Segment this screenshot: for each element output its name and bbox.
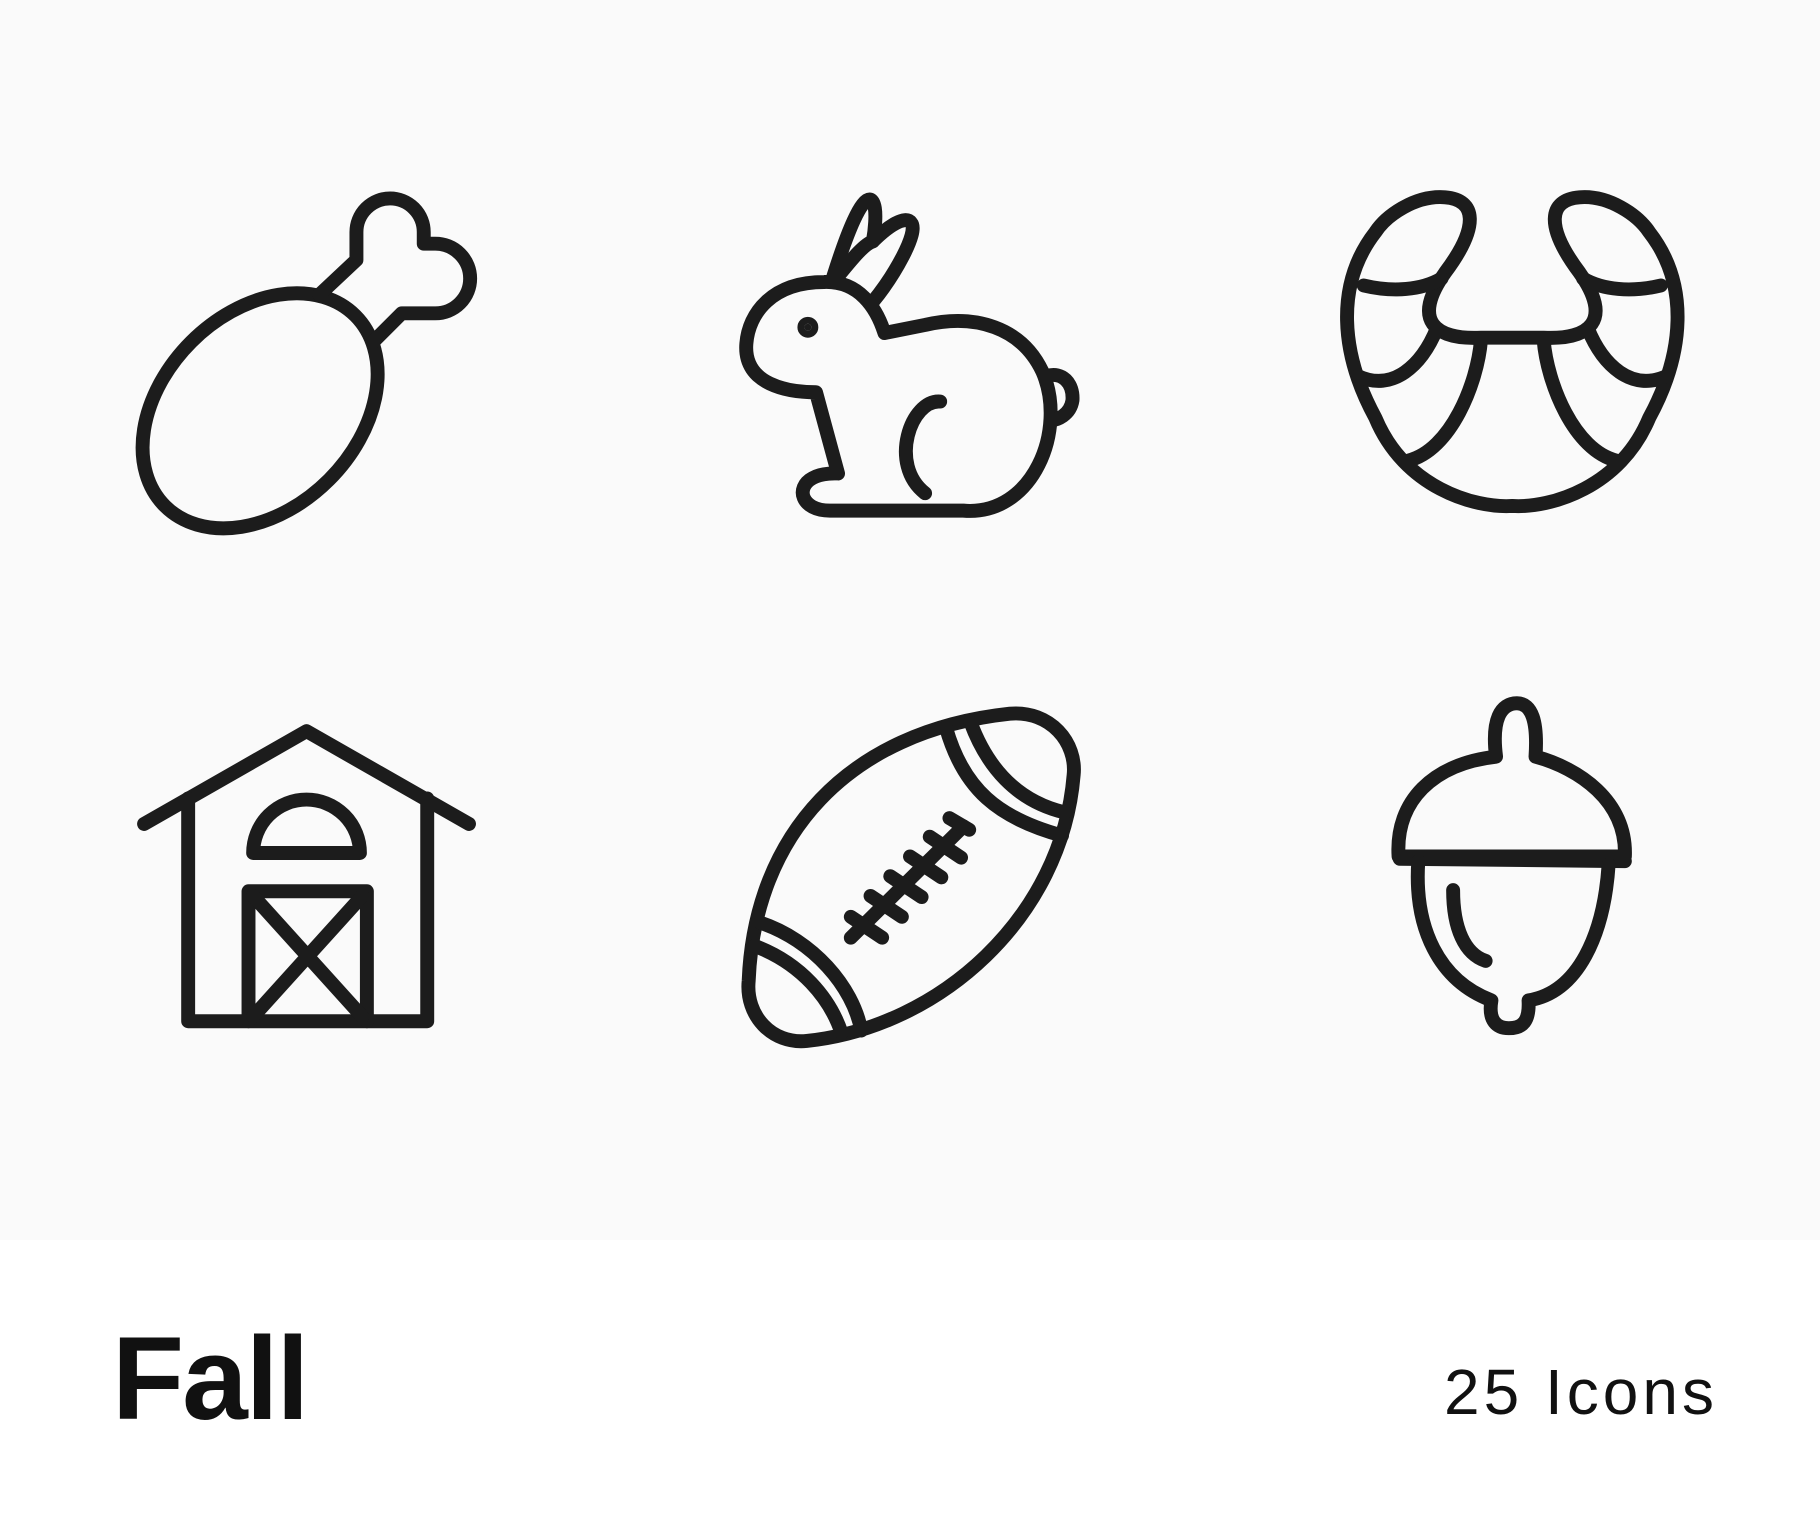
icon: football (748, 713, 1074, 1041)
icon: barn (144, 731, 469, 1021)
title: Fall (112, 1313, 307, 1445)
icon: drumstick (96, 198, 470, 575)
icon: acorn (1398, 703, 1625, 1028)
icon: croissant (1347, 197, 1678, 506)
icon: rabbit (746, 199, 1073, 511)
icon count: 25 Icons (1444, 1356, 1718, 1428)
